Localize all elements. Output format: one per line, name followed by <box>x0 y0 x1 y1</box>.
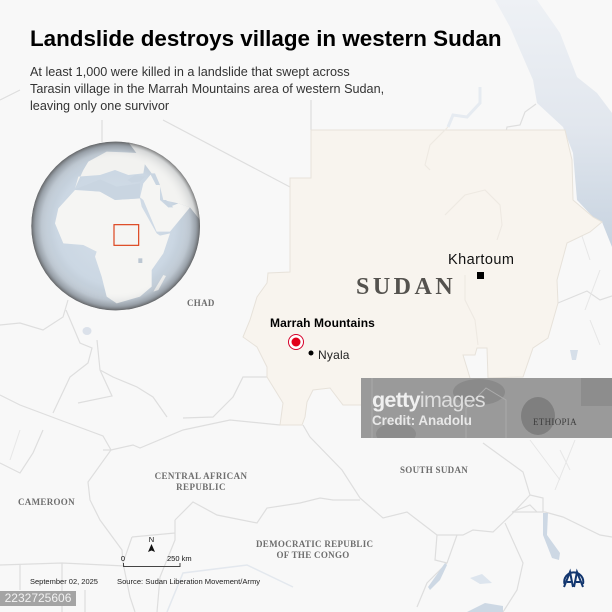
ethiopian highland relief <box>10 5 600 490</box>
khartoum marker <box>477 272 484 279</box>
country label: democratic republic of the congo: OF THE CONGO <box>276 550 350 560</box>
date: September 02, 2025 <box>30 577 98 586</box>
mediterranean <box>96 191 140 200</box>
intro text: leaving only one survivor <box>30 99 169 113</box>
country label: sudan: SUDAN <box>356 274 456 300</box>
country label: south sudan: SOUTH SUDAN <box>400 465 468 475</box>
title: Landslide destroys village in western Sudan <box>30 26 502 51</box>
congo river <box>167 565 293 612</box>
marrah marker <box>288 334 304 350</box>
persian gulf <box>164 200 173 208</box>
madagascar <box>153 275 166 292</box>
nyala marker <box>308 350 314 356</box>
country label: central african republic: CENTRAL AFRICAN <box>155 471 247 481</box>
intro text <box>30 65 384 113</box>
country label: ethiopia: ETHIOPIA <box>533 417 577 427</box>
scale bar and north arrow: 0 <box>121 554 125 563</box>
sudan inner rivers <box>425 127 502 345</box>
caspian sea <box>150 173 160 185</box>
source: Source: Sudan Liberation Movement/Army <box>117 577 260 586</box>
red locator box <box>114 225 139 245</box>
black sea <box>128 175 145 183</box>
intro text: At least 1,000 were killed in a landslide that swept across <box>30 65 350 79</box>
arabia and asia <box>140 173 190 232</box>
country label: central african republic <box>155 471 247 492</box>
sudan land <box>243 130 602 425</box>
lake victoria <box>138 258 142 263</box>
watermark logo text: gettyimages <box>372 388 485 412</box>
country label: cameroon: CAMEROON <box>18 497 75 507</box>
lake nasser <box>448 87 480 127</box>
intro text: Tarasin village in the Marrah Mountains area of western Sudan, <box>30 82 384 96</box>
city label: khartoum: Khartoum <box>448 252 514 268</box>
watermark panel <box>361 378 612 438</box>
globe <box>31 140 203 310</box>
africa <box>55 190 170 303</box>
lakes <box>82 327 578 612</box>
image id tag: 2232725606 <box>5 591 71 605</box>
scale bar and north arrow: 250 km <box>167 554 192 563</box>
red sea <box>495 0 612 247</box>
location label: marrah mountains: Marrah Mountains <box>270 316 375 330</box>
europe <box>75 152 147 188</box>
watermark credit: Credit: Anadolu <box>372 413 472 428</box>
country label: democratic republic of the congo <box>256 539 373 560</box>
country label: chad: CHAD <box>187 298 215 308</box>
country label: democratic republic of the congo: DEMOCRATIC REPUBLIC <box>256 539 373 549</box>
scale bar and north arrow: N <box>149 535 154 544</box>
city label: nyala: Nyala <box>318 348 350 362</box>
marker group <box>288 272 484 356</box>
country label: central african republic: REPUBLIC <box>176 482 226 492</box>
